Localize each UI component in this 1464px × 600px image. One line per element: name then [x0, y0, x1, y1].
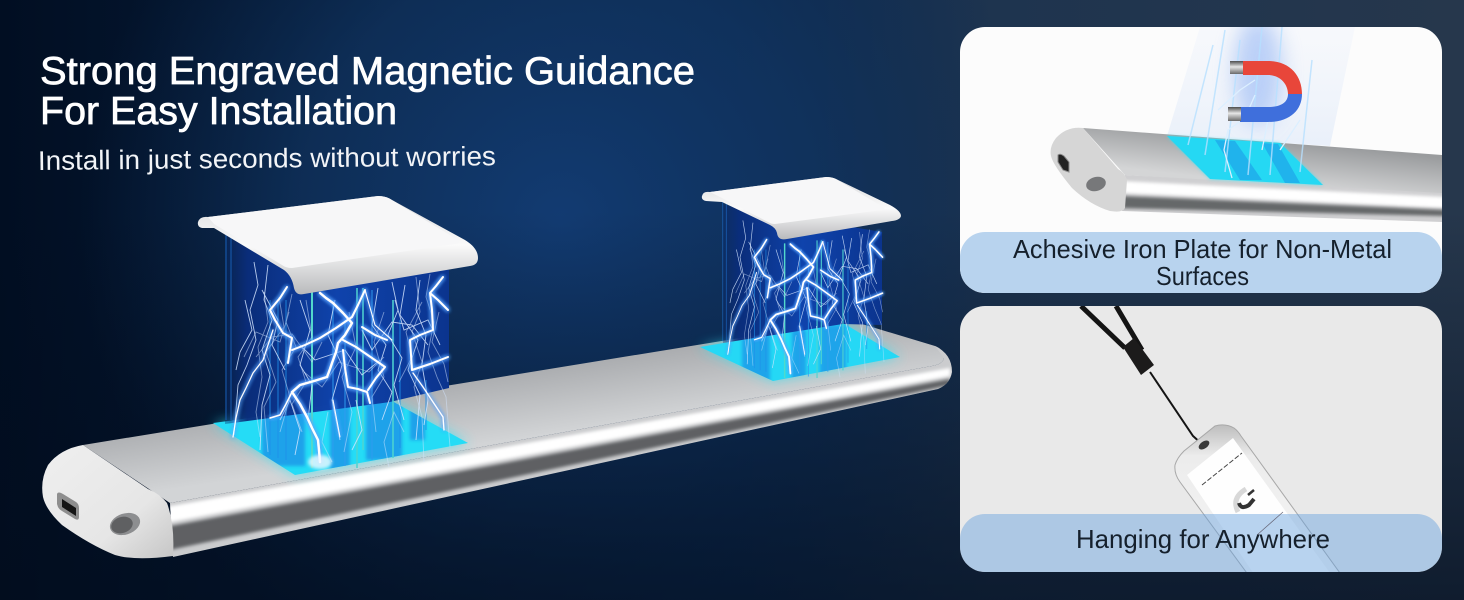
blue field and streaks [225, 232, 449, 468]
iron plate [702, 177, 901, 239]
bar end cap [42, 445, 173, 558]
cyan pad [700, 323, 900, 381]
USB port [57, 492, 79, 520]
bar front face [160, 340, 960, 565]
cyan pad [213, 395, 468, 475]
magnetic field: left [198, 196, 478, 475]
panel: iron plate [960, 15, 1445, 293]
caption: iron plate [960, 232, 1442, 293]
magnetic light bar [42, 321, 960, 565]
icon: horseshoe magnet [1228, 61, 1302, 122]
cyan pad and streaks [1167, 27, 1323, 185]
caption: hanging: Hanging for Anywhere [1076, 524, 1330, 554]
title [40, 50, 695, 133]
magnetic beam [1168, 27, 1348, 146]
hanging device [1175, 425, 1345, 580]
subtitle: Install in just seconds without worries [38, 141, 496, 176]
caption: iron plate: Achesive Iron Plate for Non-Metal [1013, 234, 1392, 264]
blue field and lightning [723, 197, 884, 378]
bar [1051, 128, 1445, 222]
caption: hanging [960, 512, 1442, 572]
lanyard hole [107, 509, 143, 539]
iron plate [198, 196, 478, 294]
lightning [233, 262, 450, 469]
magnetic field: right [700, 177, 901, 381]
title: Strong Engraved Magnetic Guidance [40, 50, 695, 93]
bar top face [83, 321, 944, 503]
panel: hanging [960, 306, 1442, 580]
title: For Easy Installation [40, 90, 397, 133]
caption: iron plate: Surfaces [1156, 261, 1249, 291]
lanyard [1081, 306, 1203, 445]
